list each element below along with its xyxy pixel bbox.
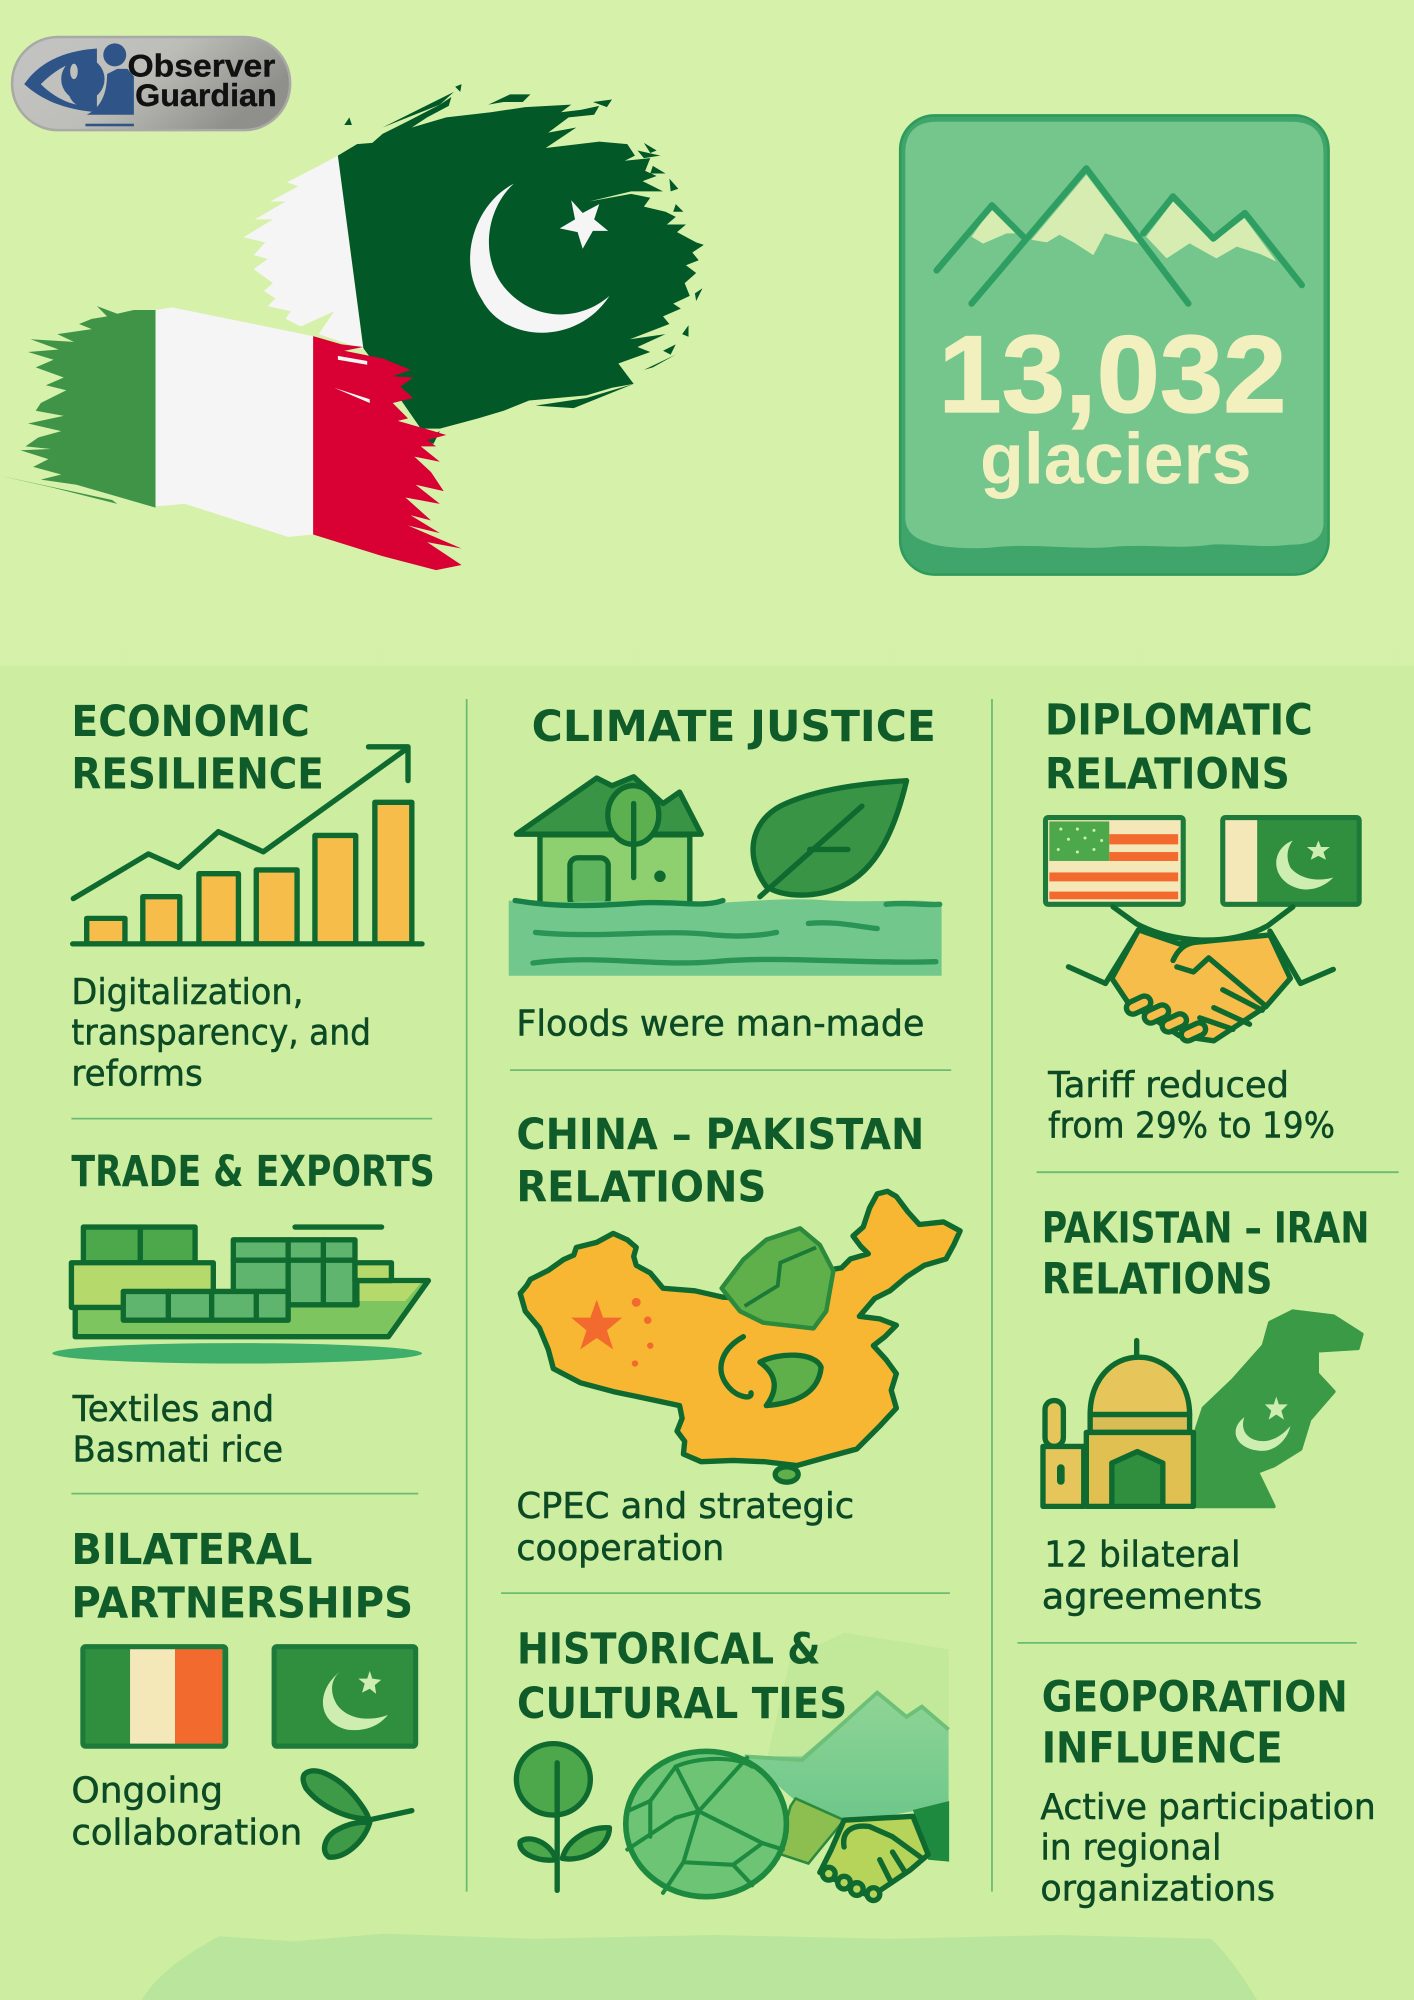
logo: Observer Guardian [12, 37, 290, 130]
background mountains [745, 1633, 949, 1824]
peak outlines [937, 168, 1302, 304]
icon: mountains [937, 168, 1302, 304]
icon: Pakistan flag [1223, 818, 1359, 904]
text: transparency, and [71, 1013, 371, 1054]
heading: HISTORICAL & [517, 1624, 820, 1674]
heading [1045, 696, 1313, 799]
callout card: 13,032 glaciers [900, 115, 1329, 575]
star [560, 200, 608, 249]
logo text: Guardian [135, 77, 277, 113]
brush line [0, 476, 117, 504]
icon: flooded house [516, 777, 701, 906]
heading: RESILIENCE [71, 749, 324, 799]
text: agreements [1042, 1576, 1262, 1617]
green band [20, 306, 156, 508]
icon: mosque [1043, 1341, 1193, 1506]
text: organizations [1040, 1869, 1275, 1910]
text: collaboration [71, 1812, 302, 1853]
map: Pakistan [1195, 1311, 1362, 1506]
heading [71, 1525, 413, 1628]
panel: geoporation influence [1040, 1673, 1376, 1910]
panel: economic resilience [71, 697, 422, 1094]
icon: person [85, 43, 134, 126]
heading: RELATIONS [516, 1163, 766, 1213]
column dividers [466, 699, 468, 1892]
icon: handshake [778, 1798, 949, 1901]
white fleck [334, 356, 370, 403]
text: from 29% to 19% [1048, 1106, 1335, 1147]
panel: bilateral partnerships [71, 1525, 416, 1857]
icon: leaf sprig [303, 1771, 412, 1857]
text [516, 1486, 854, 1569]
heading: INFLUENCE [1042, 1724, 1283, 1774]
text: Ongoing [71, 1770, 223, 1811]
map: China [520, 1191, 960, 1482]
heading: BILATERAL [71, 1525, 312, 1575]
panel: china pakistan relations [516, 1110, 960, 1569]
text [71, 972, 371, 1094]
stat number: 13,032 [938, 314, 1286, 436]
heading: GEOPORATION [1042, 1673, 1348, 1723]
icon: handshake [1068, 907, 1333, 1043]
text: Active participation [1040, 1787, 1376, 1828]
bar chart with arrow [73, 747, 422, 944]
heading [71, 697, 324, 799]
stat label: glaciers [980, 418, 1252, 499]
text: Floods were man-made [516, 1004, 924, 1045]
white band [244, 156, 363, 349]
bottom decorative hill [142, 1934, 1257, 2000]
text: Textiles and [72, 1389, 274, 1430]
heading: ECONOMIC [71, 697, 310, 747]
text: Basmati rice [73, 1430, 283, 1471]
heading: RELATIONS [1042, 1254, 1272, 1304]
icon: flood water [509, 899, 942, 976]
icon: United States flag [1046, 818, 1183, 904]
red band [313, 336, 462, 570]
panel: diplomatic relations [1045, 696, 1359, 1147]
star [571, 1300, 622, 1349]
icon: Pakistan flag [274, 1647, 416, 1746]
icon: Italy flag [83, 1647, 226, 1746]
text [1040, 1787, 1376, 1910]
heading: PARTNERSHIPS [71, 1578, 413, 1628]
heading: CULTURAL TIES [517, 1679, 847, 1729]
Italy flag brush stroke [0, 306, 462, 570]
text: 12 bilateral [1044, 1534, 1241, 1575]
heading [516, 1110, 924, 1213]
icon: eye [24, 48, 105, 112]
icon: leaf [753, 781, 907, 897]
text: reforms [71, 1053, 203, 1094]
text: Digitalization, [71, 972, 303, 1013]
text [1047, 1065, 1335, 1147]
heading: CHINA – PAKISTAN [516, 1110, 924, 1160]
snow caps [972, 175, 1276, 261]
crescent [470, 184, 609, 333]
heading: DIPLOMATIC [1045, 696, 1313, 746]
icon: tree [516, 1744, 609, 1890]
heading: TRADE & EXPORTS [71, 1147, 435, 1197]
text: cooperation [516, 1528, 724, 1569]
heading [517, 1624, 847, 1729]
panel: trade and exports [52, 1147, 435, 1471]
logo text: Observer [128, 48, 275, 84]
heading [1042, 1203, 1369, 1304]
heading [1042, 1673, 1348, 1774]
text: in regional [1040, 1828, 1221, 1869]
panel: pakistan iran relations [1042, 1203, 1369, 1617]
text: Tariff reduced [1047, 1065, 1289, 1106]
white band [156, 307, 313, 537]
brush flecks [344, 84, 703, 444]
icon: cargo ship [52, 1227, 428, 1364]
text [71, 1770, 302, 1853]
lower content background [0, 666, 1414, 2000]
icon: globe [626, 1751, 786, 1897]
panel: climate justice [509, 702, 942, 1045]
heading: CLIMATE JUSTICE [532, 702, 936, 752]
text [72, 1389, 283, 1471]
text [1042, 1534, 1262, 1617]
logo text [128, 48, 277, 113]
green field [338, 97, 704, 429]
heading: RELATIONS [1045, 749, 1290, 799]
panel: historical and cultural ties [516, 1624, 949, 1901]
Pakistan flag brush stroke [244, 84, 704, 444]
text: CPEC and strategic [516, 1486, 854, 1527]
